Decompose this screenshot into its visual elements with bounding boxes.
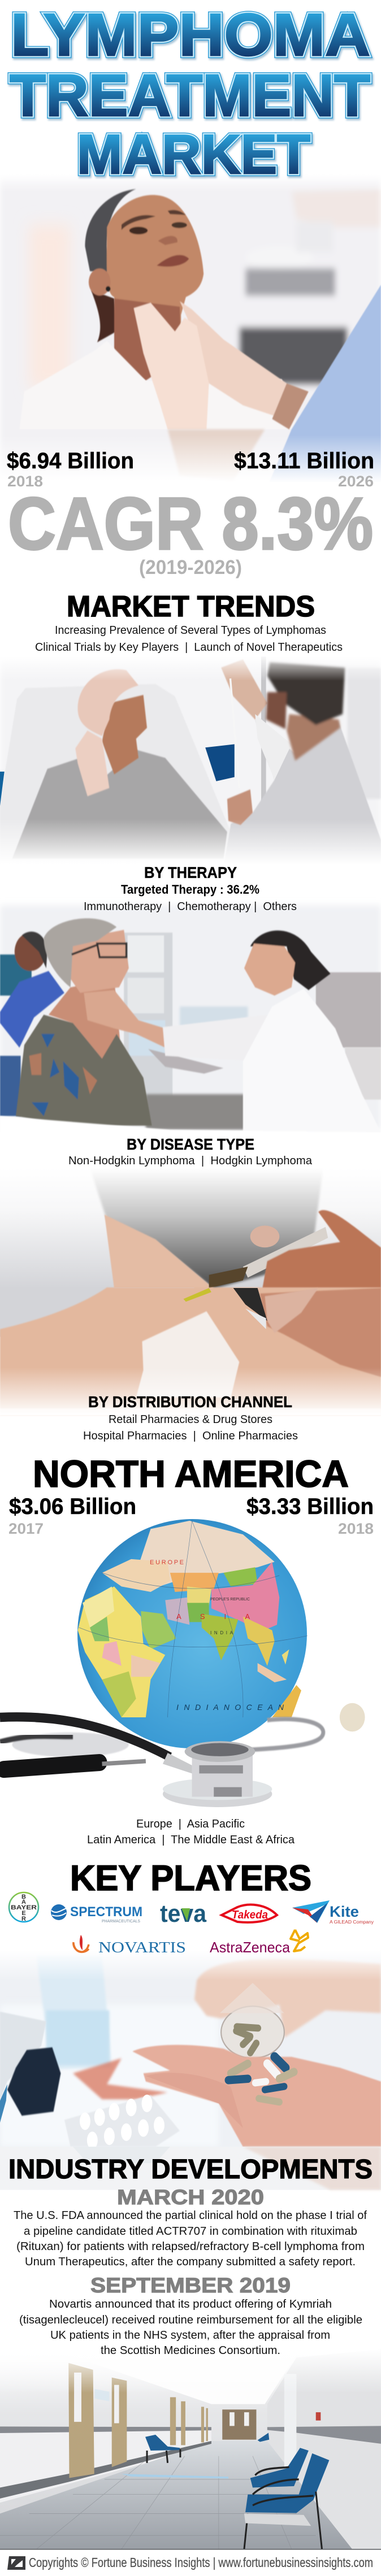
photo: doctor examining patient's neck xyxy=(0,178,381,493)
title: TREATMENT xyxy=(10,63,370,129)
by disease type xyxy=(68,1135,313,1167)
globe xyxy=(77,1519,308,1748)
title: LYMPHOMA xyxy=(12,3,371,70)
therapy photo upper fade xyxy=(0,652,381,915)
title: LYMPHOMA xyxy=(11,2,370,68)
box at left xyxy=(0,2012,46,2101)
industry developments heading: INDUSTRY DEVELOPMENTS xyxy=(8,2155,373,2185)
other regions: Latin America | The Middle East & Africa xyxy=(87,1833,295,1846)
development: march 2020: Unum Therapeutics, after the company submitted a safety report. xyxy=(25,2255,356,2268)
market trends: Clinical Trials by Key Players | Launch of Novel Therapeutics xyxy=(35,641,343,654)
drinking glass with pills xyxy=(220,1983,284,2058)
doctor lower hand xyxy=(227,789,253,825)
by distribution channel: BY DISTRIBUTION CHANNEL xyxy=(88,1393,292,1411)
globe: PEOPLE'S REPUBLIC xyxy=(210,1598,250,1602)
north america xyxy=(8,1453,374,1537)
development: september 2019: the Scottish Medicines Consortium. xyxy=(101,2344,280,2357)
market size stats: $6.94 Billion xyxy=(7,449,134,473)
logo: bayer: BAYER xyxy=(11,1904,37,1911)
patient shirt xyxy=(12,750,227,859)
cagr: (2019-2026) xyxy=(139,556,242,578)
title: MARKET xyxy=(78,125,311,187)
doctor blue sleeve xyxy=(265,285,381,493)
photo: doctor checking older woman's neck xyxy=(0,905,381,1176)
development: march 2020: a pipeline candidate titled ACTR707 in combination with rituximab xyxy=(24,2225,357,2238)
gloved hand xyxy=(262,1210,381,1289)
floor xyxy=(0,2441,352,2549)
gloved hands xyxy=(133,301,309,429)
development: september 2019: UK patients in the NHS system, after the appraisal from xyxy=(50,2329,330,2342)
title: MARKET xyxy=(77,123,310,185)
by therapy xyxy=(84,864,297,913)
doctor arm and coat xyxy=(84,989,381,1133)
photo continuation: fading forearm and sleeve xyxy=(168,429,265,481)
footer background xyxy=(0,2549,381,2576)
arm xyxy=(0,1287,381,1415)
north america: 2018 xyxy=(338,1520,374,1537)
logo: astrazeneca: AstraZeneca xyxy=(210,1939,291,1956)
logo: bayer xyxy=(9,1892,38,1922)
photo: injection into arm xyxy=(0,1168,381,1289)
logo: takeda xyxy=(222,1905,277,1922)
title: MARKET xyxy=(77,123,310,185)
pills photo bottom strip under heading xyxy=(0,2147,381,2190)
by therapy: Targeted Therapy : 36.2% xyxy=(121,882,259,897)
by therapy: Immunotherapy | Chemotherapy | Others xyxy=(84,900,297,913)
end doors xyxy=(222,2409,256,2440)
logo: bayer: B xyxy=(21,1894,26,1900)
icon: fortune business insights logo xyxy=(7,2556,25,2570)
north america: 2017 xyxy=(8,1520,44,1537)
stethoscope xyxy=(0,1703,365,1807)
north america: $3.33 Billion xyxy=(246,1494,374,1519)
shelves xyxy=(124,933,172,1102)
development: march 2020: (Rituxan) for patients with relapsed/refractory B-cell lymphoma from xyxy=(16,2240,365,2253)
logo: kite xyxy=(292,1900,374,1925)
market trends: Increasing Prevalence of Several Types of Lymphomas xyxy=(55,624,326,637)
lower hand xyxy=(132,2045,381,2147)
capsules xyxy=(228,2057,294,2102)
development: september 2019: (tisagenlecleucel) received routine reimbursement for all the eligible xyxy=(19,2313,362,2326)
title: TREATMENT xyxy=(11,64,371,130)
by distribution channel: Hospital Pharmacies | Online Pharmacies xyxy=(83,1429,298,1442)
logo: kite: A GILEAD Company xyxy=(330,1920,374,1925)
photo: patient with headscarf and doctor xyxy=(0,656,381,868)
upper hand xyxy=(194,1959,381,2038)
development: september 2019 xyxy=(19,2274,362,2357)
pulse oximeter xyxy=(7,2047,60,2116)
left doors xyxy=(68,2363,208,2478)
right wall xyxy=(267,2349,381,2549)
north america: $3.06 Billion xyxy=(9,1494,136,1519)
photo: hospital corridor xyxy=(0,2349,381,2549)
doctor head xyxy=(244,930,331,995)
logo: astrazeneca xyxy=(210,1930,308,1956)
blister pack xyxy=(64,2095,180,2147)
development: september 2019: SEPTEMBER 2019 xyxy=(90,2274,291,2297)
development: march 2020: MARCH 2020 xyxy=(117,2186,264,2209)
logo: bayer: R xyxy=(21,1916,26,1922)
north america: NORTH AMERICA xyxy=(33,1453,349,1495)
by distribution channel xyxy=(83,1393,298,1442)
hair net xyxy=(90,1168,323,1289)
logo: spectrum: SPECTRUM xyxy=(70,1904,142,1920)
title: TREATMENT xyxy=(10,63,370,129)
photo: pills poured into hand xyxy=(0,1950,381,2149)
patient face and neck xyxy=(89,195,204,381)
syringe xyxy=(243,1227,328,1278)
globe: E U R O P E xyxy=(150,1559,184,1566)
hand holding syringe xyxy=(260,1288,381,1377)
key players heading: KEY PLAYERS xyxy=(70,1859,311,1898)
chair with sheet xyxy=(0,684,230,868)
logo: bayer: A xyxy=(21,1899,26,1905)
title: LYMPHOMA xyxy=(11,2,370,68)
doctor head xyxy=(266,662,345,760)
logo: takeda: Takeda xyxy=(232,1909,268,1921)
headscarf xyxy=(75,669,138,796)
doctor coat xyxy=(223,720,381,868)
logo: novartis: NOVARTIS xyxy=(98,1939,186,1956)
water glass xyxy=(36,1956,112,2069)
market size stats: 2026 xyxy=(338,473,374,490)
logo: teva: teva xyxy=(160,1900,206,1927)
logo: spectrum: PHARMACEUTICALS xyxy=(102,1920,140,1924)
title: LYMPHOMA xyxy=(11,2,370,68)
globe: A S I A xyxy=(176,1612,250,1621)
white band over photo bottom xyxy=(0,1116,381,1176)
other regions xyxy=(87,1817,295,1846)
market trends xyxy=(35,590,343,654)
logo: spectrum xyxy=(51,1904,142,1924)
market trends: MARKET TRENDS xyxy=(67,590,315,623)
market size stats xyxy=(7,449,374,490)
logo: kite: Kite xyxy=(330,1903,359,1920)
by disease type: Non-Hodgkin Lymphoma | Hodgkin Lymphoma xyxy=(68,1154,313,1167)
iv pole and tube xyxy=(261,656,266,810)
globe: INDIA xyxy=(210,1630,233,1635)
development: march 2020: The U.S. FDA announced the partial clinical hold on the phase I trial of xyxy=(14,2209,367,2222)
photo continuation: arm, wipe and hand xyxy=(0,1287,381,1417)
globe: I N D I A N O C E A N xyxy=(176,1703,284,1712)
patient face xyxy=(102,695,147,774)
market size stats: $13.11 Billion xyxy=(234,449,374,473)
patient shirt xyxy=(19,341,299,429)
photo top and bottom fades xyxy=(0,169,381,655)
exam bed xyxy=(316,972,381,1047)
nurse in background xyxy=(0,932,64,1116)
by disease type: BY DISEASE TYPE xyxy=(127,1135,254,1153)
development: september 2019: Novartis announced that its product offering of Kymriah xyxy=(49,2297,332,2310)
title: MARKET xyxy=(77,123,310,185)
development: march 2020 xyxy=(14,2186,367,2268)
logo: novartis xyxy=(73,1935,186,1956)
older woman xyxy=(16,919,152,1126)
patient hair xyxy=(85,189,136,342)
blue benches xyxy=(145,2433,329,2513)
red wrapper xyxy=(73,2058,168,2099)
gauze and glove xyxy=(136,1311,239,1398)
title: TREATMENT xyxy=(10,63,370,129)
title xyxy=(10,2,371,187)
market size stats: 2018 xyxy=(7,473,43,490)
needle hub xyxy=(183,1288,211,1302)
other regions: Europe | Asia Pacific xyxy=(136,1817,245,1830)
doctor raised arm xyxy=(221,659,267,720)
by therapy: BY THERAPY xyxy=(144,864,237,881)
neck skin xyxy=(105,1215,214,1289)
logo: bayer: E xyxy=(21,1910,26,1917)
by distribution channel: Retail Pharmacies & Drug Stores xyxy=(109,1413,272,1426)
rails xyxy=(0,2426,211,2433)
